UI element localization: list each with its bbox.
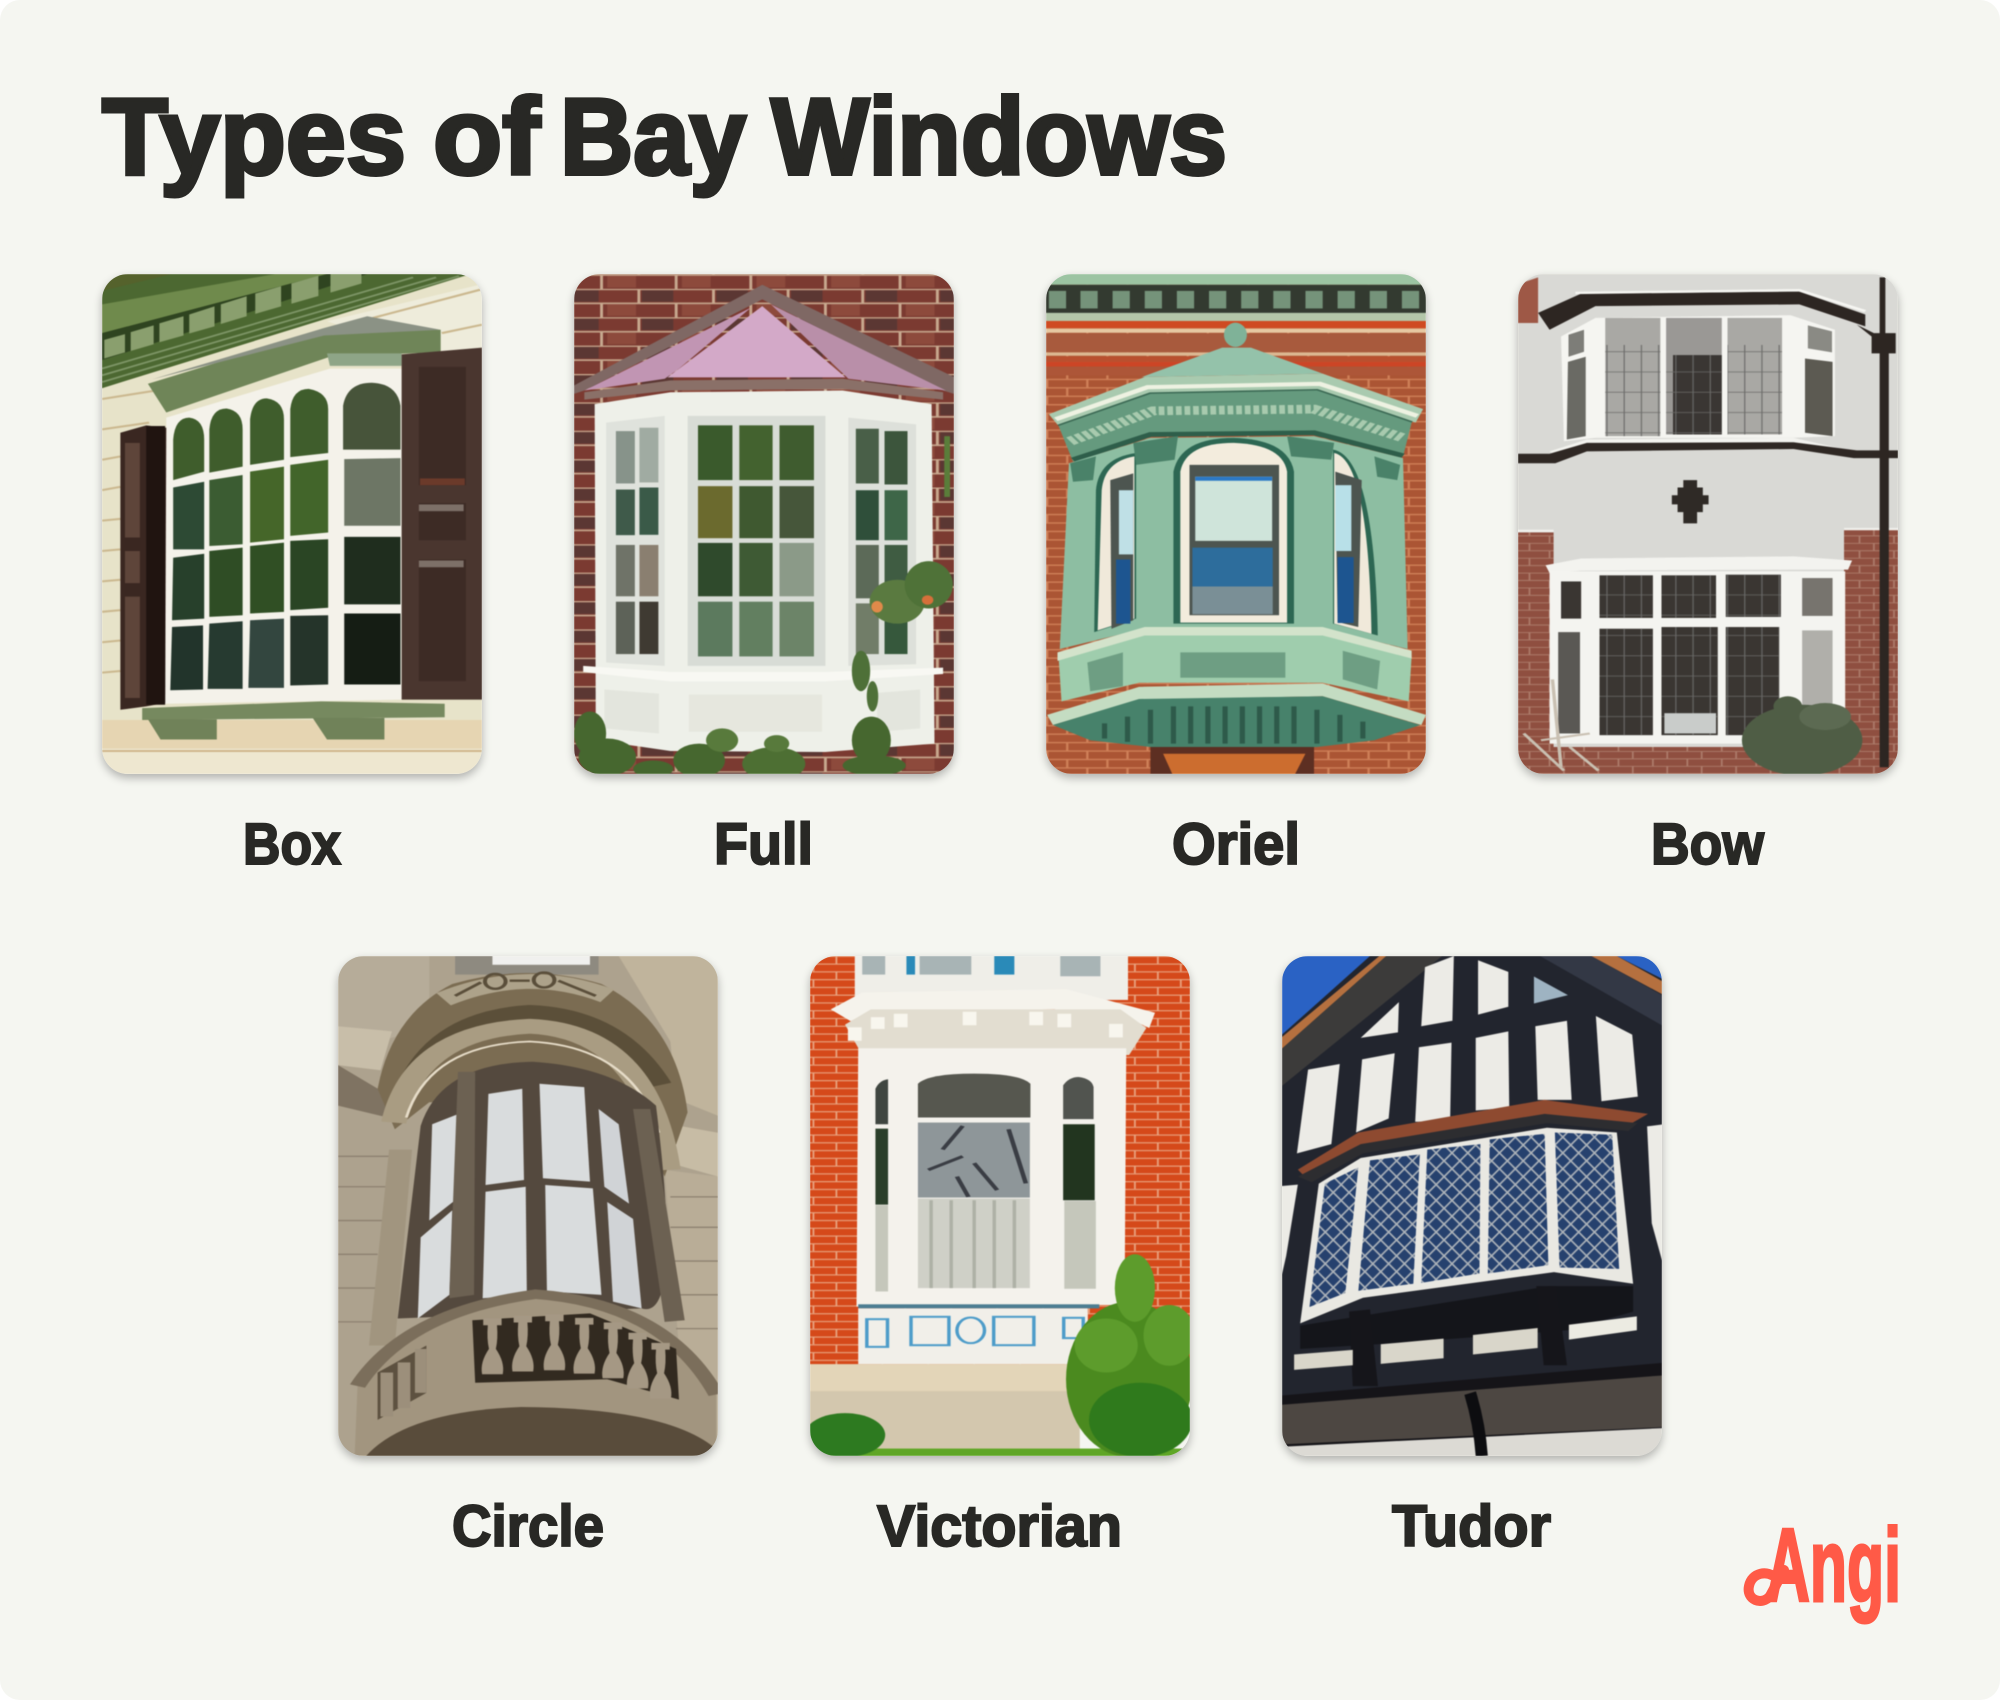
capitals: [1070, 436, 1400, 482]
cross ornament: [1672, 480, 1709, 523]
cornice with dentils: [102, 274, 471, 388]
panel: Tudor bay window photo: [1282, 956, 1662, 1456]
gable roof edges: [1282, 956, 1662, 1086]
upper brick courses: [1046, 321, 1426, 375]
balcony with balusters: [355, 1293, 716, 1456]
left window: [1094, 453, 1136, 632]
title: Types: [102, 76, 406, 198]
panel: Full bay window photo: [574, 274, 954, 774]
right window: [1063, 1077, 1096, 1289]
panel: Bow bay window photo: [1518, 274, 1898, 774]
lower brickwork: [1518, 529, 1898, 774]
lower white panels: [1294, 1316, 1637, 1370]
string course: [1518, 438, 1898, 463]
lower cornice: [1546, 556, 1852, 573]
label: Bow: Bow: [1651, 812, 1765, 877]
label: Box: Box: [243, 812, 341, 877]
bare branches: [1524, 679, 1598, 771]
label: Tudor: Tudor: [1392, 1494, 1551, 1559]
sky: [1282, 956, 1662, 1035]
label: Oriel: Oriel: [1172, 812, 1300, 877]
brick panel below: [1150, 747, 1314, 774]
upper eave: [1538, 290, 1865, 330]
window opening: [398, 1062, 667, 1318]
window frame: [163, 369, 402, 704]
Angi logo: Angi: [1766, 1508, 1901, 1624]
panel: Oriel bay window photo: [1046, 274, 1426, 774]
right window: [1333, 450, 1378, 635]
balcony underside: [366, 1407, 713, 1456]
decorative base with blue panels: [858, 1304, 1099, 1364]
brackets under bay: [1300, 1286, 1633, 1386]
columns: [369, 1072, 685, 1346]
ornate arched hood: [378, 973, 688, 1177]
climbing plant and shrubs: [574, 436, 953, 781]
balcony railing: [855, 956, 1128, 1000]
shrub: [1742, 696, 1862, 776]
frieze: [1059, 391, 1412, 462]
copper cornice with dentils: [1046, 274, 1426, 321]
left window: [875, 1079, 888, 1291]
upper window: [1561, 315, 1835, 441]
side mouldings: [338, 1026, 718, 1177]
curved glass panes: [418, 1084, 642, 1318]
stone foundation: [810, 1364, 1080, 1450]
downpipe: [1857, 277, 1896, 767]
bay body: [595, 391, 934, 752]
title: Windows: [771, 76, 1227, 198]
arched window panes: [170, 383, 400, 690]
title: Bay: [560, 76, 746, 198]
label: Circle: Circle: [452, 1494, 604, 1559]
lower bracket: [1047, 683, 1426, 747]
center window: [688, 416, 825, 666]
center window: [918, 1074, 1030, 1288]
roof and finial: [1049, 323, 1423, 426]
tiled bay roof: [1298, 1100, 1648, 1182]
cornice with brackets: [831, 989, 1155, 1055]
sill and brackets: [102, 701, 482, 774]
panel: Circle bay window photo: [338, 956, 718, 1456]
center window: [1173, 438, 1294, 624]
half-timber white panels: [1282, 956, 1662, 1274]
base panels: [1057, 627, 1412, 701]
left shutter: [120, 425, 166, 710]
bay body: [856, 1048, 1126, 1307]
label: Victorian: Victorian: [877, 1494, 1122, 1559]
lower band and bracket post: [1282, 1363, 1662, 1456]
bay roof: [574, 285, 954, 400]
diamond leaded panes: [1309, 1132, 1619, 1307]
left window: [606, 416, 665, 666]
sill and lower panels: [583, 666, 943, 733]
right window: [848, 418, 916, 666]
title: of: [433, 76, 541, 198]
right shutter: [402, 348, 482, 700]
bay body: [1060, 436, 1408, 649]
Angi logo: [1749, 1508, 1901, 1624]
lower window: [1550, 571, 1845, 744]
bay window frame: [1300, 1128, 1633, 1323]
window above: [455, 956, 599, 975]
bay roof: [148, 316, 441, 413]
label: Full: Full: [714, 812, 813, 877]
panel: Box bay window photo: [102, 274, 482, 774]
panel: Victorian bay window photo: [810, 956, 1190, 1456]
bush and grass: [805, 1254, 1195, 1457]
title: [102, 76, 1227, 198]
